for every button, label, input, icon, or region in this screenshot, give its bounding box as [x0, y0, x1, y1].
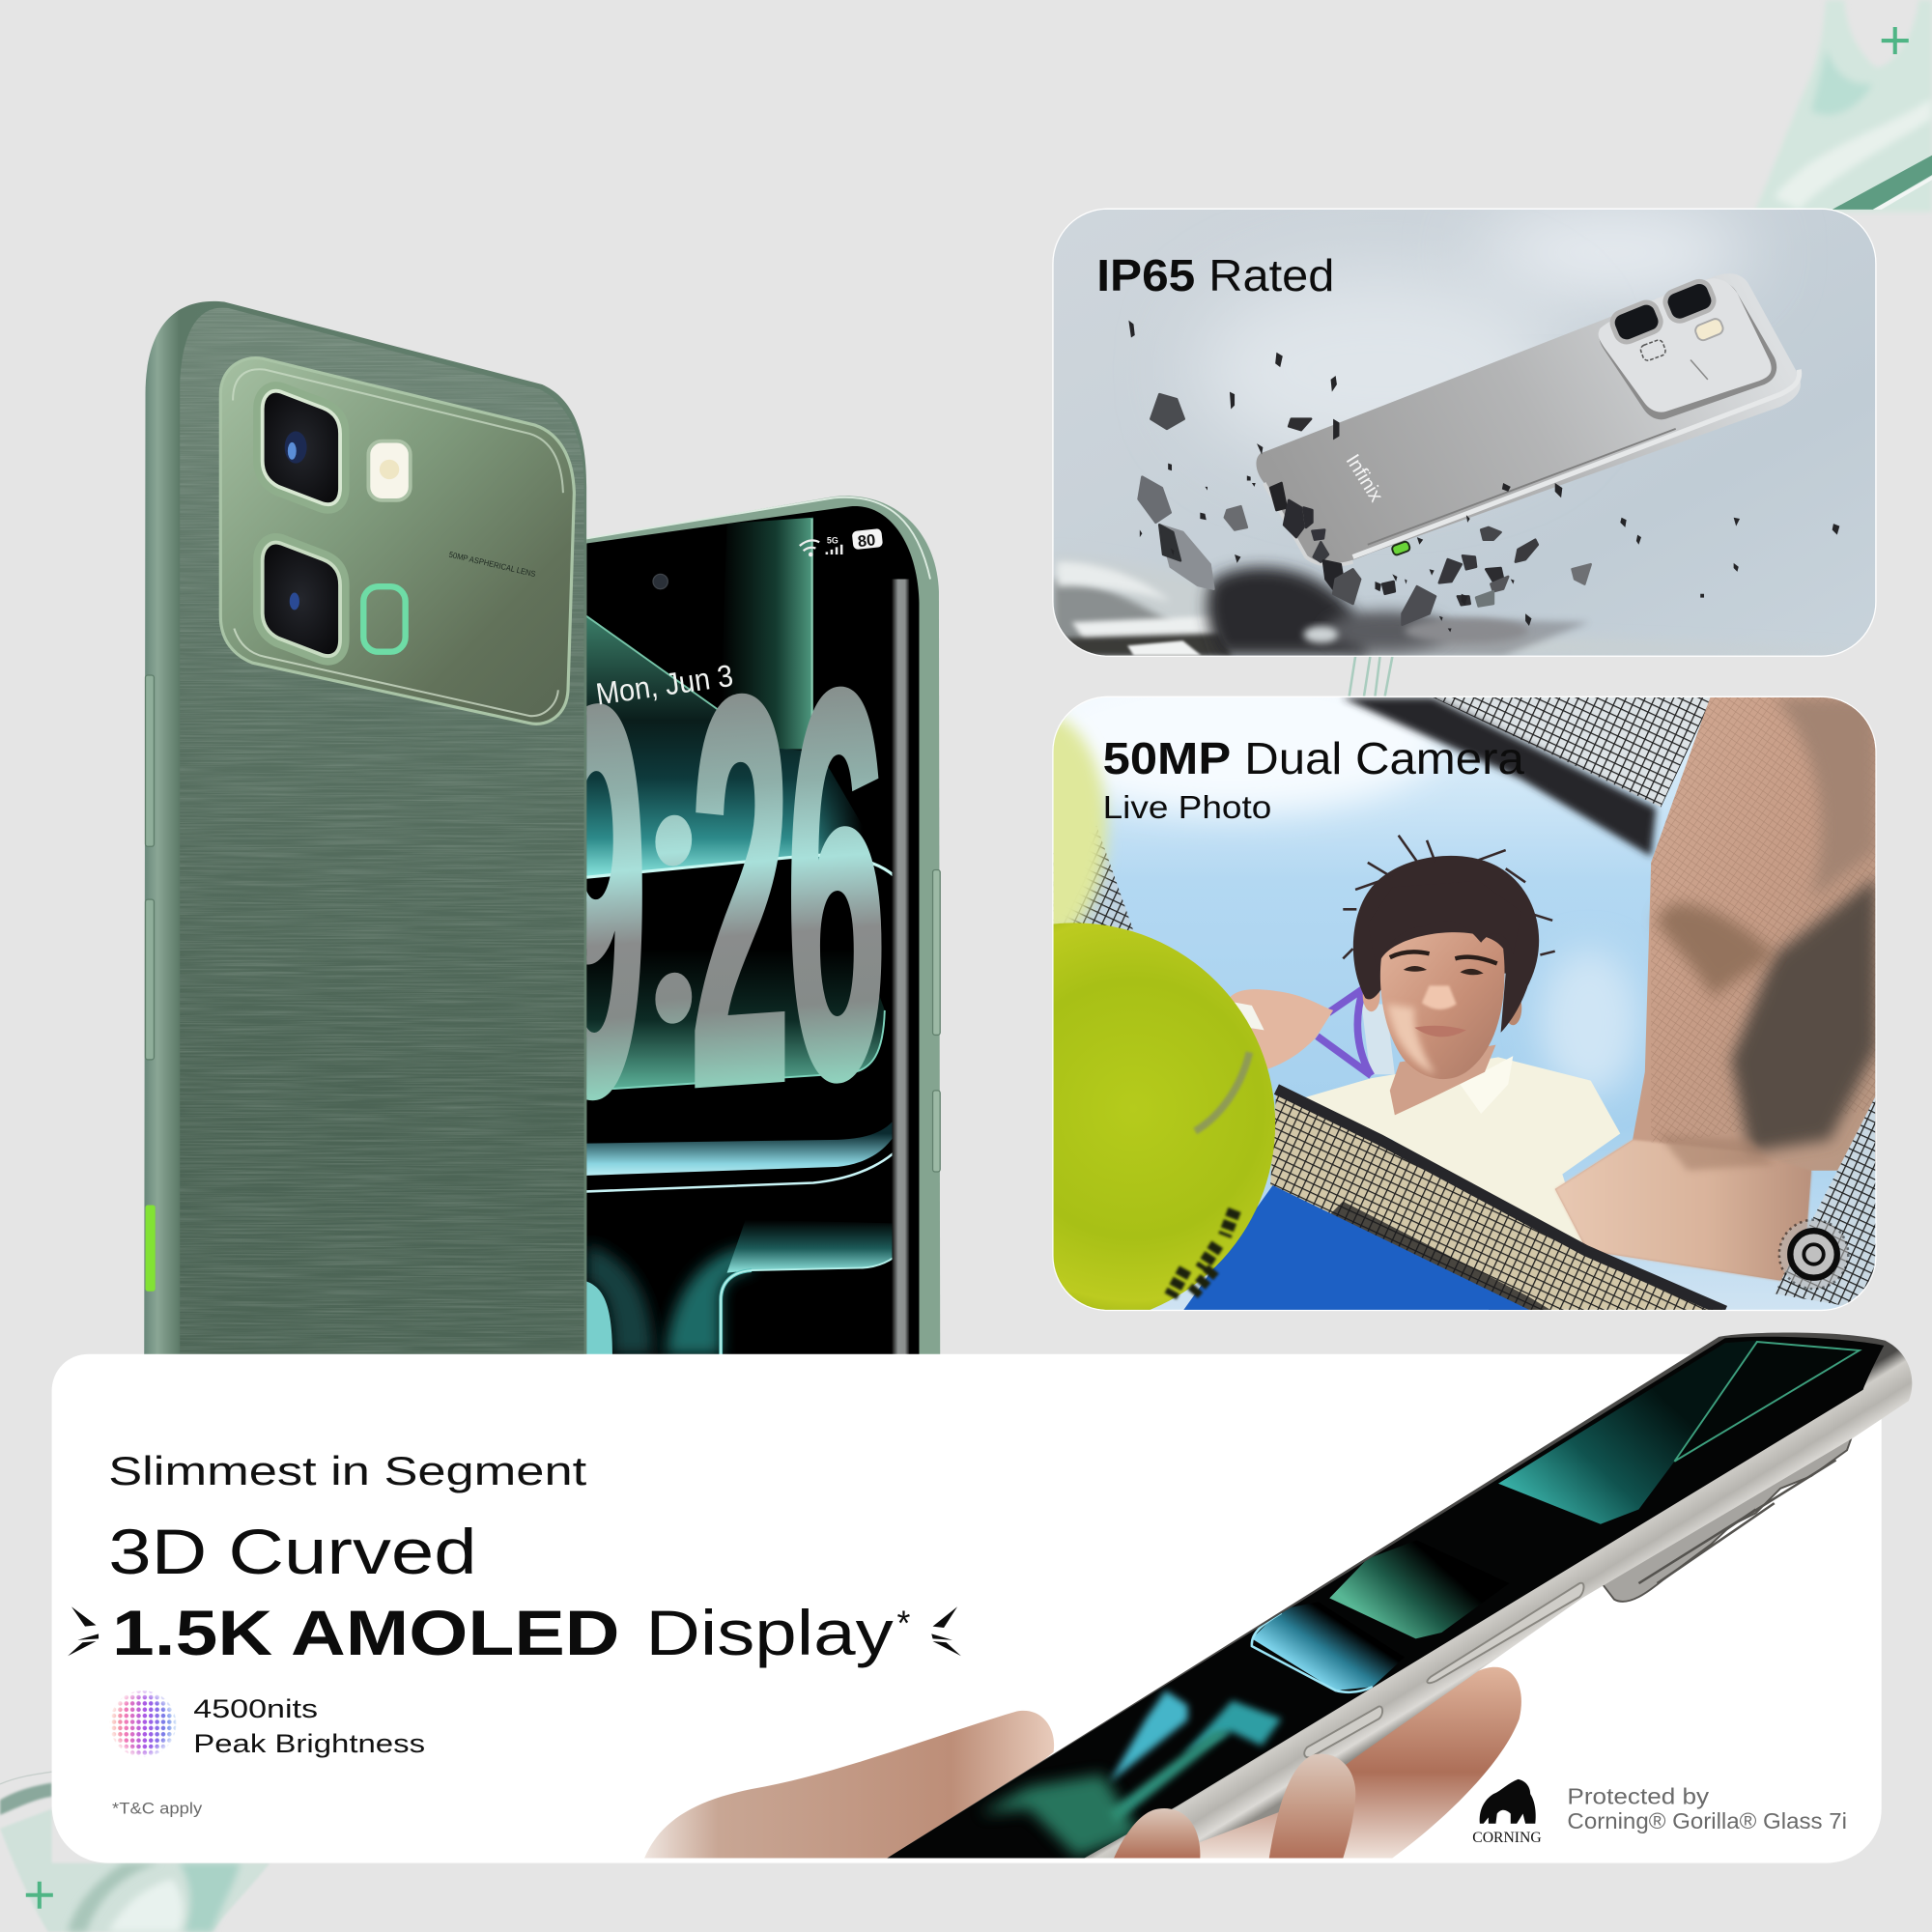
camera island	[1599, 280, 1776, 419]
jaw sunlight	[1387, 1005, 1435, 1074]
icon: gorilla logo	[1480, 1779, 1536, 1824]
decorative swirl: top right	[1754, 0, 1932, 212]
brightness text	[193, 1694, 425, 1758]
sparkles: right	[931, 1606, 961, 1656]
triangle outline	[1674, 1342, 1860, 1462]
protection text: Protected by	[1567, 1783, 1710, 1808]
island line	[1690, 359, 1708, 380]
hair strands	[1343, 836, 1555, 958]
protection text	[1567, 1783, 1847, 1833]
decorative swirl: bottom left	[0, 1772, 270, 1932]
status bar icons: 80	[857, 530, 876, 551]
mouth	[1414, 1026, 1466, 1037]
eyes and brows	[1390, 952, 1497, 963]
panel background	[52, 1354, 1882, 1863]
right phone: screen front	[586, 496, 941, 1354]
lower lens glass	[290, 593, 299, 610]
clock digits: 2	[690, 581, 790, 1201]
upper lens glass	[285, 431, 307, 464]
heading: Dual Camera	[1244, 733, 1524, 783]
front finger right	[1269, 1754, 1355, 1858]
phone body	[144, 301, 586, 1355]
gripping hand	[1225, 989, 1333, 1069]
flash	[368, 441, 411, 500]
bottom net	[1270, 1090, 1725, 1311]
nose	[1422, 985, 1457, 1009]
top net	[1342, 697, 1713, 856]
cyan glow shapes	[1109, 1690, 1188, 1783]
silver phone	[1256, 273, 1801, 565]
heading: slimmest: Slimmest in Segment	[108, 1448, 587, 1493]
neck	[1390, 1045, 1495, 1115]
racket grip	[1225, 1001, 1264, 1030]
power key	[1304, 1706, 1382, 1757]
hair back	[1353, 856, 1539, 1033]
green bottom glow	[980, 1775, 1140, 1857]
heading: Live Photo	[1103, 790, 1271, 826]
collar	[1460, 1056, 1513, 1114]
heading: AMOLED display: *	[897, 1605, 911, 1643]
dust cloud	[1207, 567, 1528, 656]
hair fringe	[1368, 881, 1521, 974]
flash	[1694, 318, 1723, 342]
heading: AMOLED display: Display	[645, 1598, 895, 1669]
upper lens	[263, 391, 340, 504]
lenses	[1609, 299, 1664, 345]
panel: display features	[52, 1306, 1912, 1873]
upper lens glint	[288, 442, 297, 460]
clock digits: 9	[547, 590, 647, 1210]
ears	[1363, 980, 1380, 1011]
LED	[1391, 541, 1410, 555]
heading: AMOLED display	[112, 1598, 911, 1669]
decorative sliver between cards	[1350, 657, 1392, 696]
lower right net	[1775, 1096, 1875, 1311]
fingerprint ring	[1639, 339, 1666, 362]
brand: Infinix	[1342, 451, 1387, 506]
left phone: back	[144, 301, 586, 1355]
heading: IP65	[1096, 250, 1195, 300]
blue panel	[1252, 1602, 1405, 1690]
phone metal frame	[887, 1333, 1912, 1858]
arm and hand	[1555, 697, 1877, 1284]
frame highlight	[586, 497, 930, 579]
thumb	[644, 1711, 1054, 1858]
front finger left	[1114, 1808, 1200, 1858]
lower lens rim	[263, 543, 340, 656]
racket strings	[1361, 1005, 1395, 1074]
rocks	[1139, 394, 1591, 625]
protection text: Corning® Gorilla® Glass 7i	[1567, 1808, 1847, 1833]
lens label: 50MP ASPHERICAL LENS	[448, 550, 537, 579]
heading: AMOLED display: 1.5K AMOLED	[112, 1598, 620, 1669]
small debris	[1128, 321, 1839, 632]
shirt	[1303, 1057, 1620, 1248]
camera module	[220, 358, 574, 724]
brightness text: 4500nits	[193, 1694, 318, 1723]
brightness text: Peak Brightness	[193, 1729, 425, 1758]
phone screen	[863, 1306, 1910, 1873]
punch-hole camera	[653, 574, 668, 589]
face	[1380, 932, 1505, 1079]
left side buttons	[146, 675, 154, 1060]
heading	[1103, 733, 1524, 826]
man	[1225, 836, 1620, 1248]
footnote: *T&C apply	[112, 1800, 203, 1818]
plus mark: bottom left	[26, 1882, 53, 1909]
ground	[1053, 559, 1586, 656]
upper lens rim	[263, 391, 340, 504]
icon: brightness globe	[108, 1690, 178, 1758]
heading: 3D curved: 3D Curved	[108, 1517, 477, 1588]
status bar icons	[800, 528, 883, 556]
phone frame	[586, 496, 940, 1355]
clock colon: :	[631, 631, 717, 1115]
panel: 50MP dual camera card	[873, 666, 1877, 1324]
left net	[1054, 826, 1140, 949]
sparkles: left	[68, 1606, 99, 1656]
corning wordmark: CORNING	[1472, 1830, 1542, 1846]
palm behind phone	[1171, 1667, 1521, 1858]
heading: Rated	[1208, 250, 1334, 300]
status bar icons: 5G	[827, 535, 838, 545]
side buttons	[933, 870, 940, 1172]
small blurred ball	[983, 715, 1106, 941]
panel: IP65 rated card	[1052, 209, 1877, 657]
right ear	[1504, 991, 1521, 1025]
flash dots	[380, 460, 399, 479]
live photo icon	[1779, 1220, 1848, 1289]
eyes	[1404, 966, 1484, 975]
green side key	[146, 1205, 156, 1292]
heading: 50MP	[1103, 733, 1231, 783]
tennis ball	[873, 923, 1275, 1324]
curved edge highlight	[892, 579, 909, 1355]
brushed texture	[180, 308, 584, 1355]
clock digits: 6	[786, 574, 887, 1194]
camera bumps	[1602, 1430, 1855, 1602]
plus mark: top right	[1882, 27, 1909, 54]
teal panel	[1498, 1341, 1757, 1524]
brushed back panel	[180, 308, 584, 1355]
volume key	[1427, 1583, 1584, 1683]
date: Mon, Jun 3	[594, 658, 735, 712]
blue court fabric	[1182, 1185, 1531, 1311]
green ring	[363, 586, 406, 652]
green panel	[1329, 1540, 1509, 1638]
hand and curved phone	[644, 1306, 1912, 1873]
lower lens	[263, 543, 340, 656]
screen	[586, 506, 920, 1354]
racket	[1318, 985, 1372, 1076]
heading	[1096, 250, 1334, 300]
